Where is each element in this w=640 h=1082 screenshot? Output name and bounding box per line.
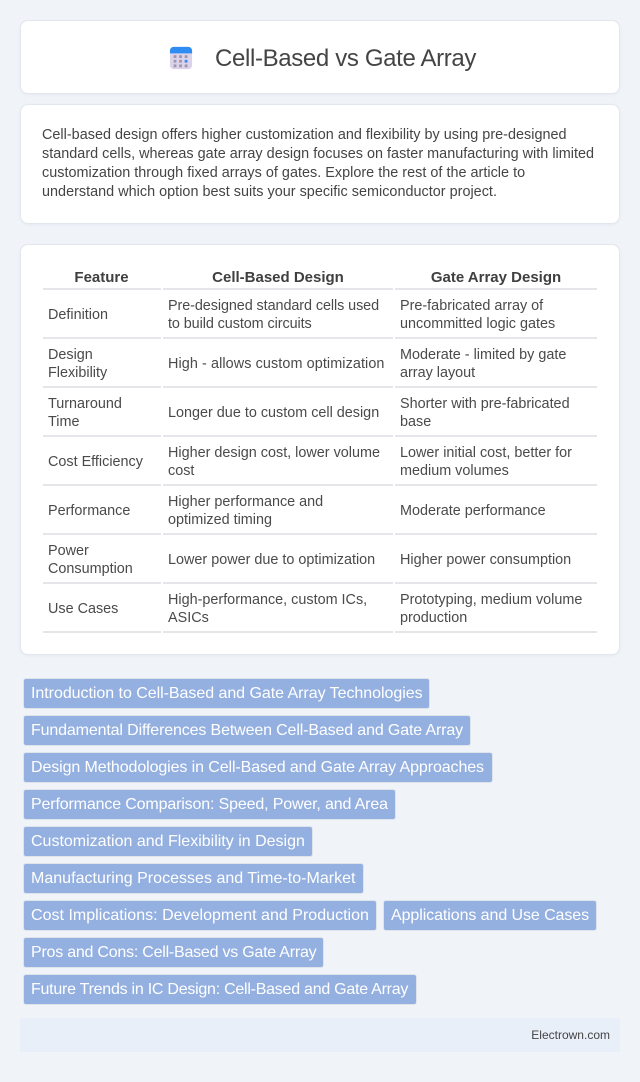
comparison table: Lower initial cost, better for — [400, 445, 572, 461]
comparison table: production — [400, 610, 467, 626]
tag: customization: Customization and Flexibility in Design — [31, 833, 305, 850]
title card — [20, 20, 620, 94]
tag: design methodologies: Design Methodologies in Cell-Based and Gate Array Approaches — [31, 759, 484, 776]
tag list: article sections — [23, 678, 597, 1005]
intro paragraph: Cell-based design offers higher customization and flexibility by using pre-designed — [42, 127, 567, 143]
icon: calendar grid — [170, 46, 192, 70]
intro paragraph: standard cells, whereas gate array design focuses on faster manufacturing with limited — [42, 146, 594, 162]
tag: fundamental differences: Fundamental Differences Between Cell-Based and Gate Array — [31, 722, 463, 739]
row: Definition: Definition — [48, 307, 108, 323]
comparison table: Pre-designed standard cells used — [168, 298, 379, 314]
footer bar — [20, 1018, 620, 1052]
comparison table — [43, 269, 597, 633]
comparison table: High-performance, custom ICs, — [168, 592, 367, 608]
tag: applications: Applications and Use Cases — [391, 907, 589, 924]
header: Cell-Based Design: Cell-Based Design — [212, 269, 344, 286]
row: Power Consumption: Power — [48, 543, 89, 559]
comparison table: High - allows custom optimization — [168, 356, 385, 372]
tag: cost implications — [23, 900, 377, 931]
row: Power Consumption — [48, 543, 133, 577]
tag: pros and cons: Pros and Cons: Cell-Based vs Gate Array — [31, 944, 316, 961]
comparison table: Moderate performance — [400, 503, 546, 519]
panel: comparison table — [20, 244, 620, 655]
row: Turnaround Time: Turnaround — [48, 396, 122, 412]
tag: performance comparison — [23, 789, 396, 820]
tag: future trends: Future Trends in IC Design: Cell-Based and Gate Array — [31, 981, 408, 998]
intro paragraph: understand which option best suits your specific semiconductor project. — [42, 184, 497, 200]
header: Feature: Feature — [74, 269, 129, 286]
comparison table: Higher performance and — [168, 494, 323, 510]
comparison table: ASICs — [168, 610, 209, 626]
row: Power Consumption: Consumption — [48, 561, 133, 577]
intro paragraph: customization through fixed arrays of gates. Explore the rest of the article to — [42, 165, 525, 181]
row: Design Flexibility — [48, 347, 108, 381]
comparison table: Shorter with pre-fabricated — [400, 396, 570, 412]
comparison table: uncommitted logic gates — [400, 316, 555, 332]
tag: introduction — [23, 678, 430, 709]
row: Use Cases: Use Cases — [48, 601, 118, 617]
row: Turnaround Time: Time — [48, 414, 79, 430]
tag: performance comparison: Performance Comparison: Speed, Power, and Area — [31, 796, 388, 813]
title: Cell-Based vs Gate Array — [215, 45, 476, 72]
comparison table: base — [400, 414, 431, 430]
tag: introduction: Introduction to Cell-Based and Gate Array Technologies — [31, 685, 423, 702]
comparison table: optimized timing — [168, 512, 272, 528]
row: Performance: Performance — [48, 503, 130, 519]
comparison table: Higher power consumption — [400, 552, 571, 568]
footer credit: Electrown.com — [531, 1028, 610, 1042]
tag: applications — [383, 900, 597, 931]
row: Design Flexibility: Flexibility — [48, 365, 107, 381]
comparison table: medium volumes — [400, 463, 509, 479]
comparison table: Longer due to custom cell design — [168, 405, 379, 421]
comparison table: cost — [168, 463, 194, 479]
intro text panel — [20, 104, 620, 224]
comparison table: Prototyping, medium volume — [400, 592, 582, 608]
header: Gate Array Design: Gate Array Design — [431, 269, 561, 286]
comparison table: Lower power due to optimization — [168, 552, 375, 568]
tag: pros and cons — [23, 937, 324, 968]
tag: customization — [23, 826, 313, 857]
comparison table: Higher design cost, lower volume — [168, 445, 380, 461]
intro paragraph — [42, 127, 594, 200]
comparison table: to build custom circuits — [168, 316, 312, 332]
row: Design Flexibility: Design — [48, 347, 93, 363]
tag: manufacturing: Manufacturing Processes and Time-to-Market — [31, 870, 356, 887]
comparison table: Moderate - limited by gate — [400, 347, 566, 363]
tag: cost implications: Cost Implications: Development and Production — [31, 907, 369, 924]
row: Cost Efficiency: Cost Efficiency — [48, 454, 143, 470]
comparison table: array layout — [400, 365, 475, 381]
tag: fundamental differences — [23, 715, 471, 746]
comparison table: Pre-fabricated array of — [400, 298, 543, 314]
tag: future trends — [23, 974, 417, 1005]
tag: design methodologies — [23, 752, 493, 783]
tag: manufacturing — [23, 863, 364, 894]
row: Turnaround Time — [48, 396, 122, 430]
